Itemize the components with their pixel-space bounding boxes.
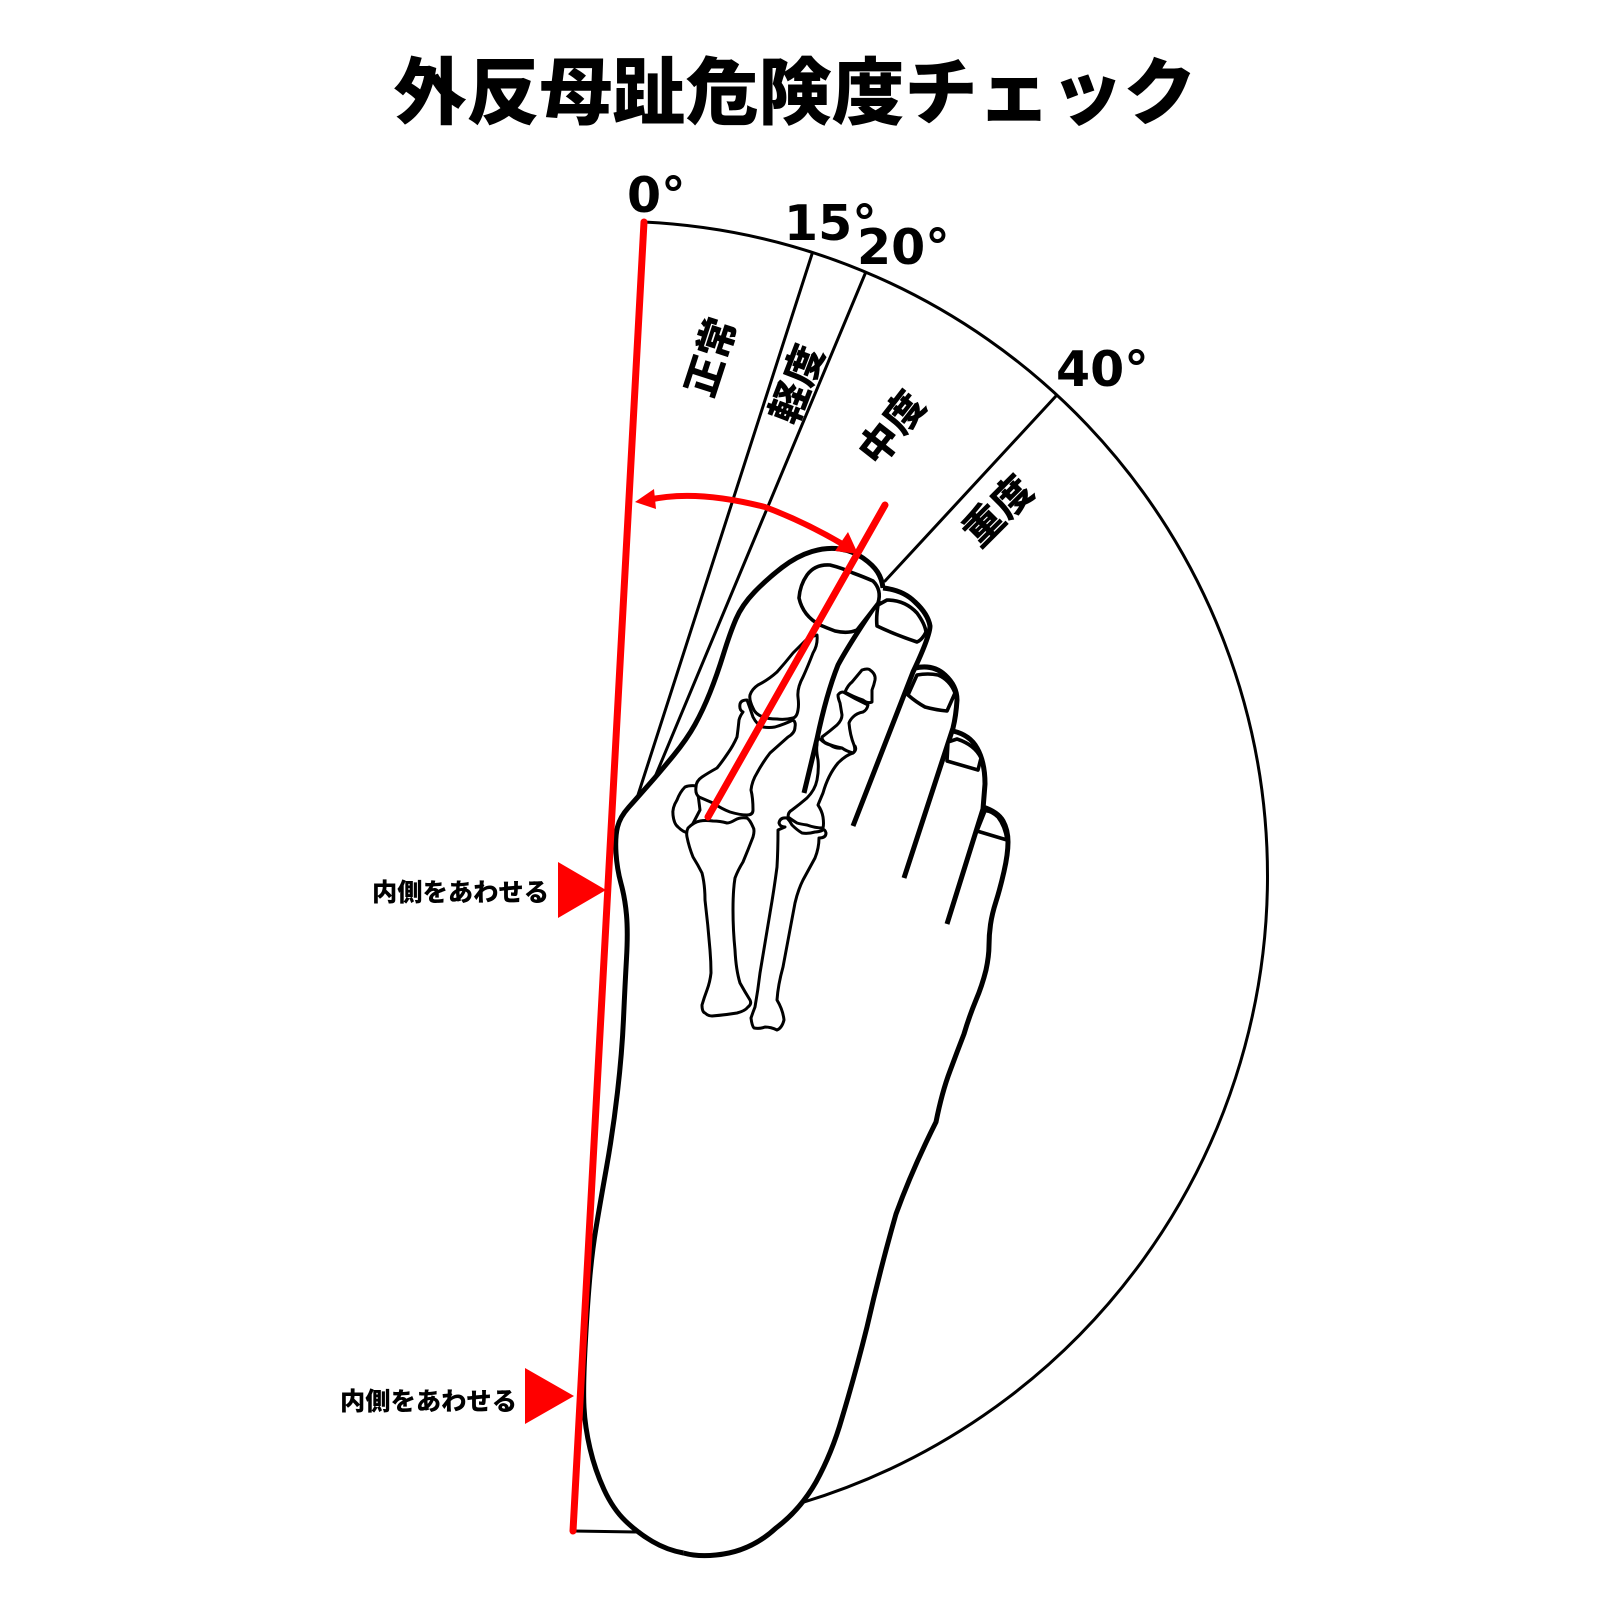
foot outline	[584, 548, 1008, 1556]
zone label moderate: 中度	[842, 377, 937, 476]
third toe	[904, 667, 957, 878]
third toe nail	[908, 674, 955, 711]
second metatarsal	[751, 818, 826, 1030]
bones	[673, 635, 875, 1030]
triangle upper	[558, 862, 606, 918]
angle label 0: 0°	[627, 167, 686, 224]
outer foot edge	[684, 807, 1008, 1556]
label upper: 内側をあわせる	[372, 873, 549, 909]
first toe distal phalanx	[750, 635, 817, 719]
alignment marker lower	[340, 1368, 574, 1424]
label lower: 内側をあわせる	[340, 1382, 517, 1418]
angle label 20: 20°	[857, 219, 950, 276]
toe nails	[799, 565, 1007, 840]
zone label severe: 重度	[947, 460, 1045, 558]
title: 外反母趾危険度チェック	[394, 34, 1196, 140]
line between first and second toe	[804, 600, 879, 793]
fourth toe nail	[947, 739, 981, 770]
gauge line 20 degrees	[655, 274, 865, 777]
second toe	[853, 588, 930, 826]
alignment marker upper	[372, 862, 606, 918]
angle label 40: 40°	[1056, 341, 1149, 398]
inner foot edge and big toe	[584, 548, 883, 1553]
fifth toe nail	[977, 811, 1007, 840]
zone label mild: 軽度	[753, 335, 836, 431]
angle gauge	[573, 167, 1268, 1532]
first metatarsal	[687, 818, 754, 1016]
fourth toe	[947, 731, 985, 924]
zone label normal: 正常	[668, 309, 748, 403]
gauge outer arc	[644, 222, 1268, 1503]
first toe proximal phalanx	[696, 700, 795, 815]
red toe axis line	[708, 505, 885, 817]
sesamoid bone	[673, 786, 700, 833]
angle label 15: 15°	[784, 195, 877, 252]
triangle lower	[525, 1368, 574, 1424]
red double-headed angle arrow	[635, 489, 858, 554]
second toe distal phalanx	[845, 669, 875, 703]
second toe proximal phalanx	[788, 739, 856, 828]
gauge baseline	[573, 1531, 640, 1532]
gauge line 40 degrees	[885, 396, 1056, 581]
second toe nail	[877, 600, 926, 642]
second toe middle phalanx	[822, 692, 868, 753]
big toe nail	[799, 565, 879, 632]
gauge line 15 degrees	[638, 254, 812, 795]
red reference line 0 degrees	[573, 222, 644, 1531]
